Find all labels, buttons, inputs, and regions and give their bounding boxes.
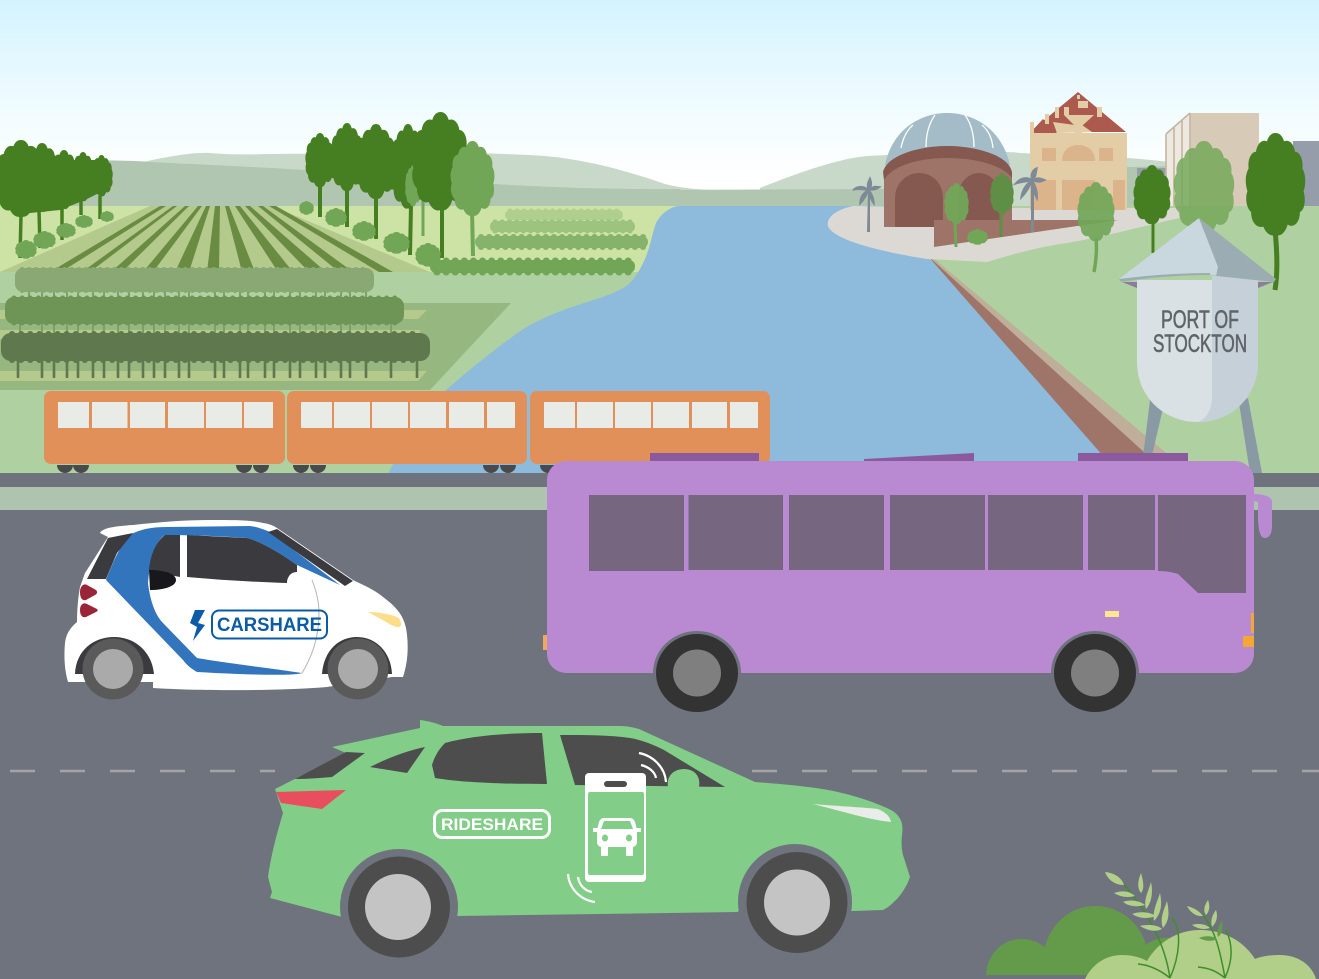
foreground dark bushes <box>986 906 1170 975</box>
icon: car front <box>593 818 641 856</box>
roof units <box>650 453 1188 463</box>
orchard ground <box>0 303 511 390</box>
bus rear light <box>543 635 548 650</box>
tower legs <box>1141 398 1262 473</box>
tree: mid green, plaza <box>990 173 1014 237</box>
carshare tail lights <box>80 584 98 617</box>
tower lettering: PORT OF <box>1161 306 1239 334</box>
frond leaves <box>1105 872 1217 931</box>
foreground light bushes <box>1085 930 1316 979</box>
bus mirror <box>1254 494 1272 538</box>
river <box>385 206 1180 480</box>
crop field with rows <box>0 206 430 272</box>
bus <box>543 453 1272 715</box>
rideshare front wheel <box>746 852 848 953</box>
road <box>0 510 1319 979</box>
rideshare rear wheel <box>348 856 450 958</box>
tree: tall dark right <box>1246 133 1305 290</box>
bus rear wheel <box>653 631 741 715</box>
carshare door line <box>302 580 319 673</box>
rotunda body <box>884 146 1012 227</box>
carshare car <box>64 520 408 700</box>
left tree group <box>0 140 113 258</box>
carshare wheel arches <box>75 637 392 674</box>
palm trees <box>853 168 1045 232</box>
field ground <box>0 206 700 300</box>
dome glass <box>885 113 1010 165</box>
tree: dark green near tower <box>1133 165 1171 253</box>
middle bushes <box>299 201 441 267</box>
sky <box>0 0 1319 210</box>
left bushes <box>15 211 114 259</box>
orchard tree rows <box>1 268 430 378</box>
middle ground <box>0 272 660 490</box>
train car 2 <box>287 391 527 464</box>
rideshare wheel arches <box>340 849 458 965</box>
distant hills <box>0 152 1319 210</box>
vineyard rows right of the field <box>430 210 648 273</box>
tower tank <box>1137 280 1258 422</box>
carshare rear wheel <box>82 638 144 700</box>
carshare headlight <box>368 612 401 627</box>
plant fronds <box>1105 872 1231 978</box>
bus windows <box>589 495 1246 593</box>
right bank ground over river edge <box>927 208 1319 480</box>
city hall <box>1030 92 1127 210</box>
rideshare badge: RIDESHARE <box>441 815 543 834</box>
water tower: STOCKTON <box>1153 330 1247 358</box>
train <box>44 391 770 473</box>
carshare windows <box>87 529 353 586</box>
tree: light green near tower <box>1077 182 1115 272</box>
rideshare car <box>268 720 910 965</box>
frond stems <box>1123 883 1231 978</box>
domed building <box>883 113 1118 247</box>
rideshare body <box>268 720 910 917</box>
tower roof <box>1122 282 1273 288</box>
rideshare tail light <box>276 790 346 809</box>
plaza bush <box>967 229 988 245</box>
train car 1 <box>44 391 285 464</box>
grey distant buildings <box>1137 141 1319 209</box>
right side ground <box>900 206 1319 490</box>
carshare seat <box>149 570 176 590</box>
wheels <box>57 465 556 473</box>
icon: signal waves bottom <box>568 874 595 902</box>
rideshare mirror <box>668 769 699 787</box>
bus front wheel <box>1051 631 1139 715</box>
road verge <box>0 487 1319 510</box>
icon: lightning bolt <box>190 610 205 641</box>
carshare body <box>64 520 408 690</box>
canal brick bank <box>927 255 1190 473</box>
icon: phone with car <box>585 773 646 882</box>
beige office building <box>1166 113 1259 209</box>
lane dashes <box>10 770 1319 772</box>
bus body <box>547 461 1254 673</box>
carshare blue swoosh <box>106 526 340 675</box>
rideshare headlight <box>813 804 891 822</box>
bus lights <box>1105 611 1119 617</box>
rideshare badge <box>434 810 550 838</box>
rideshare windows <box>295 733 725 787</box>
icon: signal waves top <box>639 753 666 782</box>
middle tree group <box>305 112 494 258</box>
water tower <box>1119 218 1276 473</box>
carshare badge: CARSHARE <box>217 615 322 636</box>
plaza <box>828 206 1180 262</box>
tree: light, plaza front <box>944 183 969 247</box>
train car 3 <box>530 391 770 464</box>
tree: large translucent behind tower <box>1174 141 1234 234</box>
orchard trunks <box>20 292 391 334</box>
carshare front wheel <box>328 638 388 700</box>
rail track <box>0 473 1319 487</box>
